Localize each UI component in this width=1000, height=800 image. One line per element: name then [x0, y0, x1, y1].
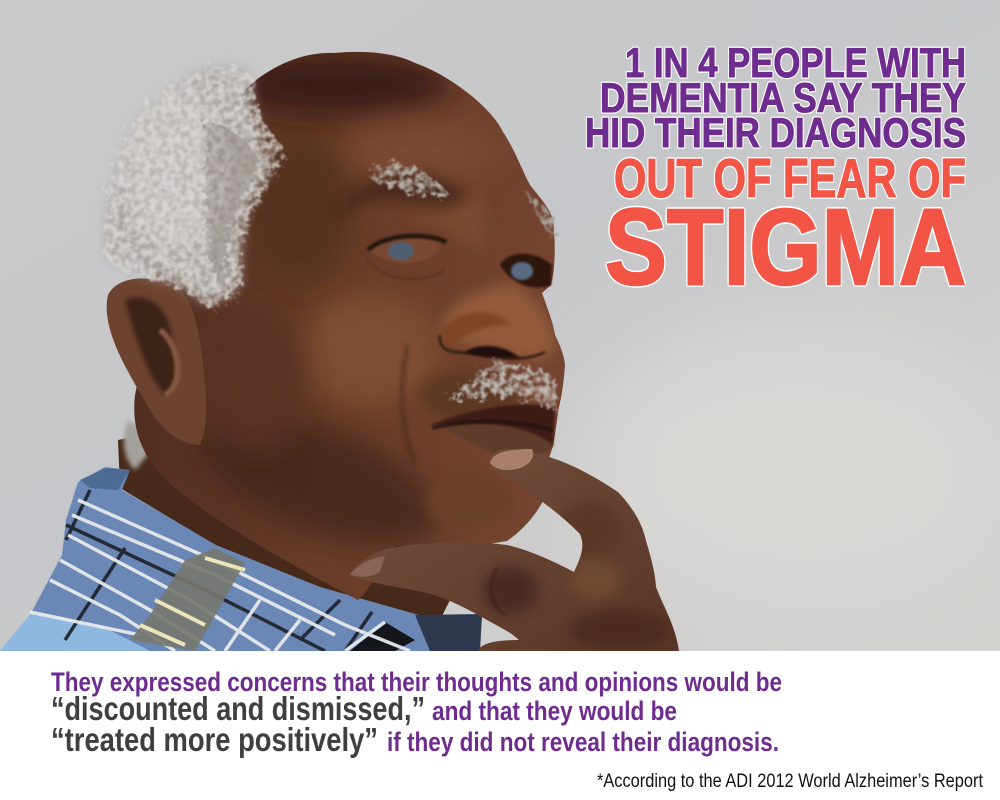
caption line 2 quote: “discounted and dismissed,” [51, 690, 425, 727]
ear [107, 278, 206, 445]
face shading [185, 55, 556, 570]
neck [118, 438, 450, 615]
caption line 3 quote: “treated more positively” [51, 721, 378, 758]
caption line 3 continuation: if they did not reveal their diagnosis. [387, 727, 779, 757]
nasolabial fold [402, 345, 415, 465]
shirt [0, 467, 482, 651]
mustache [445, 358, 557, 412]
hand [350, 449, 679, 651]
eyes [366, 236, 552, 288]
hair [104, 65, 285, 310]
bottom text block [51, 667, 984, 792]
nose [440, 283, 556, 360]
eyebrow shadow [335, 173, 465, 215]
head and face [134, 52, 565, 600]
headline [585, 39, 966, 307]
lips [430, 404, 555, 457]
eyebrow [372, 162, 554, 240]
hair behind ear and neck [120, 420, 148, 472]
caption line 1: They expressed concerns that their thoughts and opinions would be [51, 667, 782, 697]
caption line 2 continuation: and that they would be [432, 696, 677, 726]
